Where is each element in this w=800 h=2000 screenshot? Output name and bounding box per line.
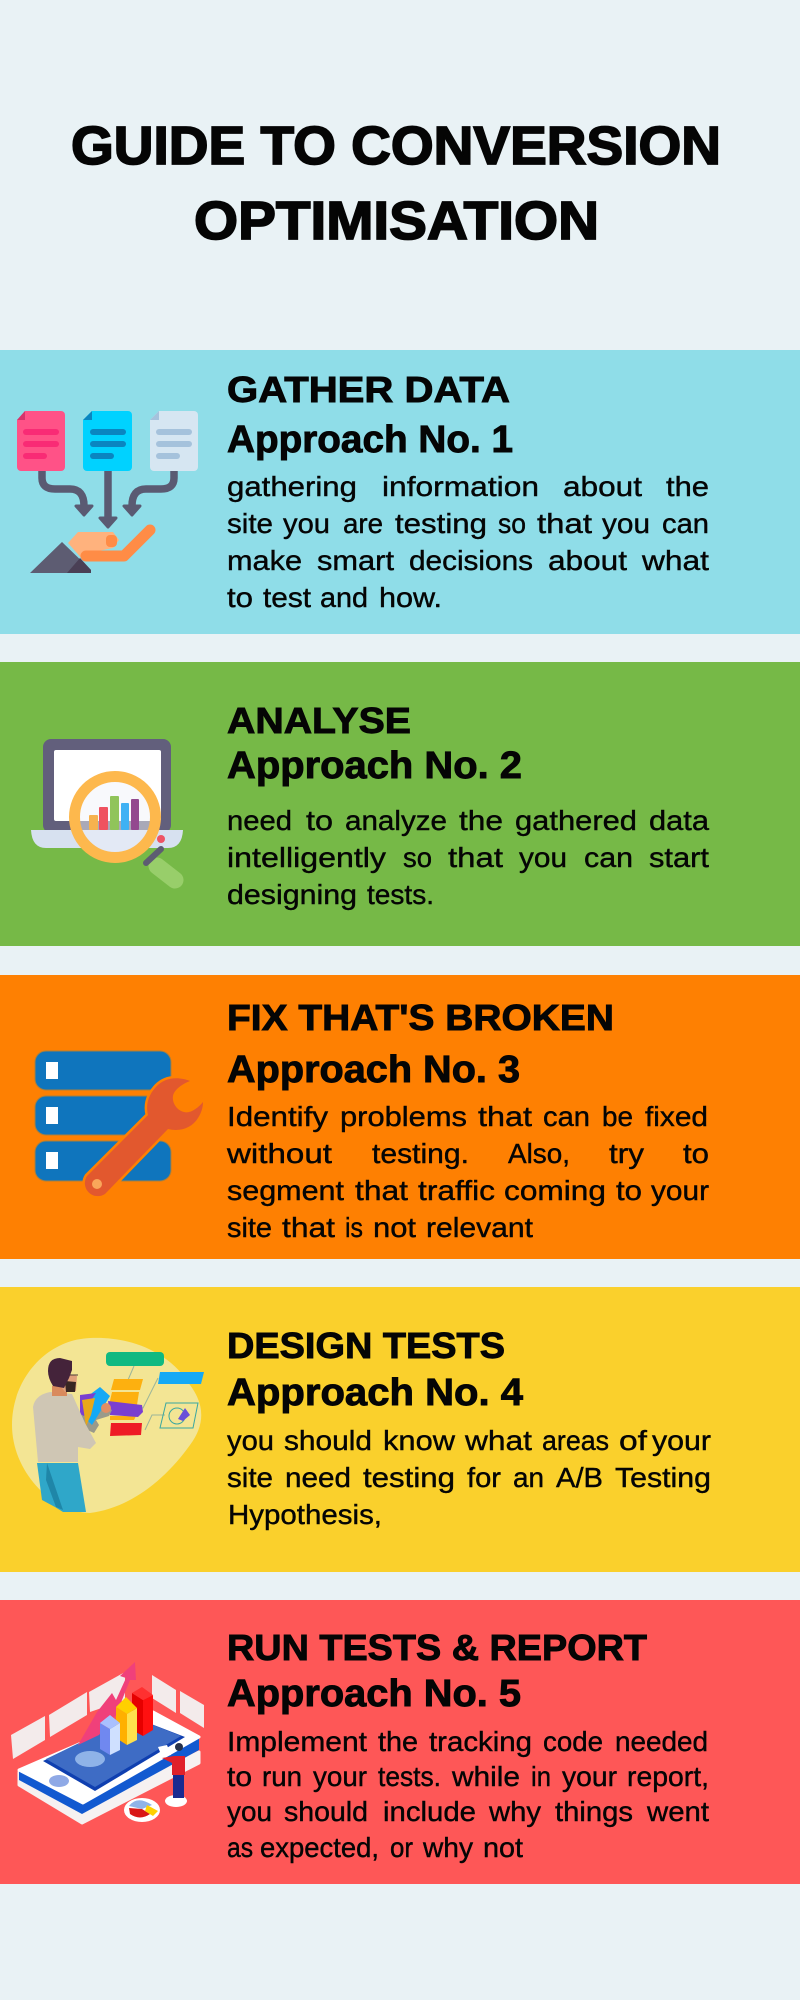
- body text: that: [355, 1175, 408, 1206]
- body text: coming: [504, 1175, 606, 1206]
- body text: [227, 471, 709, 613]
- icon: isometric phone with charts: [11, 1662, 204, 1823]
- panel: run tests and report: [0, 1600, 800, 1884]
- body text: site: [227, 508, 273, 539]
- body text: about: [563, 471, 642, 502]
- body text: the: [666, 471, 709, 502]
- body text: testing: [395, 508, 487, 539]
- body text: that: [478, 1101, 532, 1132]
- body text: include: [383, 1796, 476, 1827]
- body text: relevant: [426, 1212, 533, 1243]
- body text: Also,: [508, 1138, 570, 1169]
- body text: that: [537, 508, 592, 539]
- body text: an: [513, 1462, 544, 1493]
- body text: your: [562, 1761, 617, 1792]
- body text: for: [467, 1462, 501, 1493]
- title: GUIDE TO CONVERSION: [71, 116, 721, 176]
- body text: run: [262, 1761, 302, 1792]
- panel: analyse: [0, 662, 800, 946]
- body text: went: [646, 1796, 709, 1827]
- body text: you: [227, 1425, 274, 1456]
- icon: laptop with magnifying glass: [31, 739, 183, 880]
- heading: design tests: DESIGN TESTS: [227, 1325, 505, 1366]
- body text: in: [531, 1761, 551, 1792]
- body text: smart: [317, 545, 394, 576]
- body text: to: [683, 1138, 709, 1169]
- body text: that: [282, 1212, 335, 1243]
- body text: the: [378, 1726, 418, 1757]
- body text: information: [382, 471, 539, 502]
- body text: your: [651, 1175, 709, 1206]
- body text: that: [448, 842, 503, 873]
- title: [71, 116, 721, 251]
- body text: needed: [615, 1726, 708, 1757]
- body text: you: [283, 508, 330, 539]
- body text: not: [483, 1832, 523, 1863]
- body text: designing: [227, 879, 357, 910]
- body text: as: [227, 1832, 253, 1863]
- body text: can: [584, 842, 633, 873]
- icon: server stack with wrench: [35, 1051, 203, 1196]
- body text: areas: [542, 1425, 609, 1456]
- body text: segment: [227, 1175, 344, 1206]
- subheading: approach 5: Approach No. 5: [227, 1673, 521, 1715]
- body text: so: [498, 508, 526, 539]
- body text: can: [543, 1101, 590, 1132]
- body text: to: [227, 1761, 252, 1792]
- body text: intelligently: [227, 842, 386, 873]
- body text: testing: [363, 1462, 455, 1493]
- body text: testing.: [372, 1138, 469, 1169]
- panel: fix that's broken: [0, 975, 800, 1259]
- body text: code: [543, 1726, 603, 1757]
- body text: you: [519, 842, 567, 873]
- panel: design tests: [0, 1287, 800, 1572]
- body text: to: [616, 1175, 642, 1206]
- heading: analyse: ANALYSE: [227, 700, 411, 741]
- body text: to: [306, 805, 333, 836]
- body text: test: [263, 582, 311, 613]
- subheading: approach 4: Approach No. 4: [227, 1372, 523, 1414]
- body text: what: [464, 1425, 532, 1456]
- body text: you: [602, 508, 650, 539]
- body text: gathered: [515, 805, 637, 836]
- body text: can: [662, 508, 709, 539]
- body text: [227, 1425, 711, 1530]
- body text: tests.: [378, 1761, 441, 1792]
- body text: [227, 1726, 709, 1863]
- body text: Hypothesis,: [228, 1499, 382, 1530]
- body text: you: [227, 1796, 272, 1827]
- body text: not: [373, 1212, 416, 1243]
- subheading: approach 1: Approach No. 1: [227, 419, 513, 461]
- icon: designer arranging a flowchart: [12, 1338, 204, 1513]
- icon: documents flowing into hand: [17, 411, 198, 573]
- body text: how.: [379, 582, 442, 613]
- body text: problems: [340, 1101, 467, 1132]
- body text: make: [227, 545, 302, 576]
- body text: need: [227, 805, 292, 836]
- panel: gather data: [0, 350, 800, 634]
- body text: while: [451, 1761, 520, 1792]
- body text: should: [284, 1425, 372, 1456]
- body text: so: [403, 842, 432, 873]
- body text: to: [227, 582, 253, 613]
- body text: A/B: [556, 1462, 603, 1493]
- body text: gathering: [227, 471, 357, 502]
- body text: Testing: [615, 1462, 711, 1493]
- body text: try: [609, 1138, 644, 1169]
- body text: be: [602, 1101, 633, 1132]
- body text: things: [555, 1796, 633, 1827]
- body text: Identify: [227, 1101, 328, 1132]
- heading: gather data: GATHER DATA: [227, 369, 510, 410]
- body text: site: [227, 1462, 273, 1493]
- body text: are: [343, 508, 383, 539]
- body text: decisions: [409, 545, 533, 576]
- body text: why: [488, 1796, 541, 1827]
- heading: run tests and report: RUN TESTS & REPORT: [227, 1627, 647, 1668]
- subheading: approach 2: Approach No. 2: [227, 745, 522, 787]
- subheading: approach 3: Approach No. 3: [227, 1049, 520, 1091]
- body text: or: [390, 1832, 413, 1863]
- body text: your: [652, 1425, 711, 1456]
- body text: and: [320, 582, 368, 613]
- body text: start: [649, 842, 709, 873]
- body text: your: [313, 1761, 367, 1792]
- body text: why: [422, 1832, 473, 1863]
- body text: expected,: [260, 1832, 379, 1863]
- body text: report,: [627, 1761, 709, 1792]
- body text: without: [226, 1138, 332, 1169]
- body text: tests.: [367, 879, 434, 910]
- body text: of: [619, 1425, 647, 1456]
- body text: about: [548, 545, 627, 576]
- body text: the: [459, 805, 503, 836]
- body text: Implement: [227, 1726, 367, 1757]
- body text: tracking: [429, 1726, 532, 1757]
- body text: traffic: [418, 1175, 495, 1206]
- body text: site: [227, 1212, 272, 1243]
- body text: should: [284, 1796, 368, 1827]
- heading: fix that's broken: FIX THAT'S BROKEN: [227, 997, 614, 1038]
- body text: analyze: [345, 805, 447, 836]
- body text: [226, 1101, 709, 1243]
- title: OPTIMISATION: [194, 191, 599, 251]
- body text: is: [345, 1212, 363, 1243]
- body text: know: [383, 1425, 455, 1456]
- body text: data: [649, 805, 710, 836]
- body text: need: [285, 1462, 351, 1493]
- body text: what: [641, 545, 709, 576]
- body text: [227, 805, 710, 910]
- body text: fixed: [645, 1101, 708, 1132]
